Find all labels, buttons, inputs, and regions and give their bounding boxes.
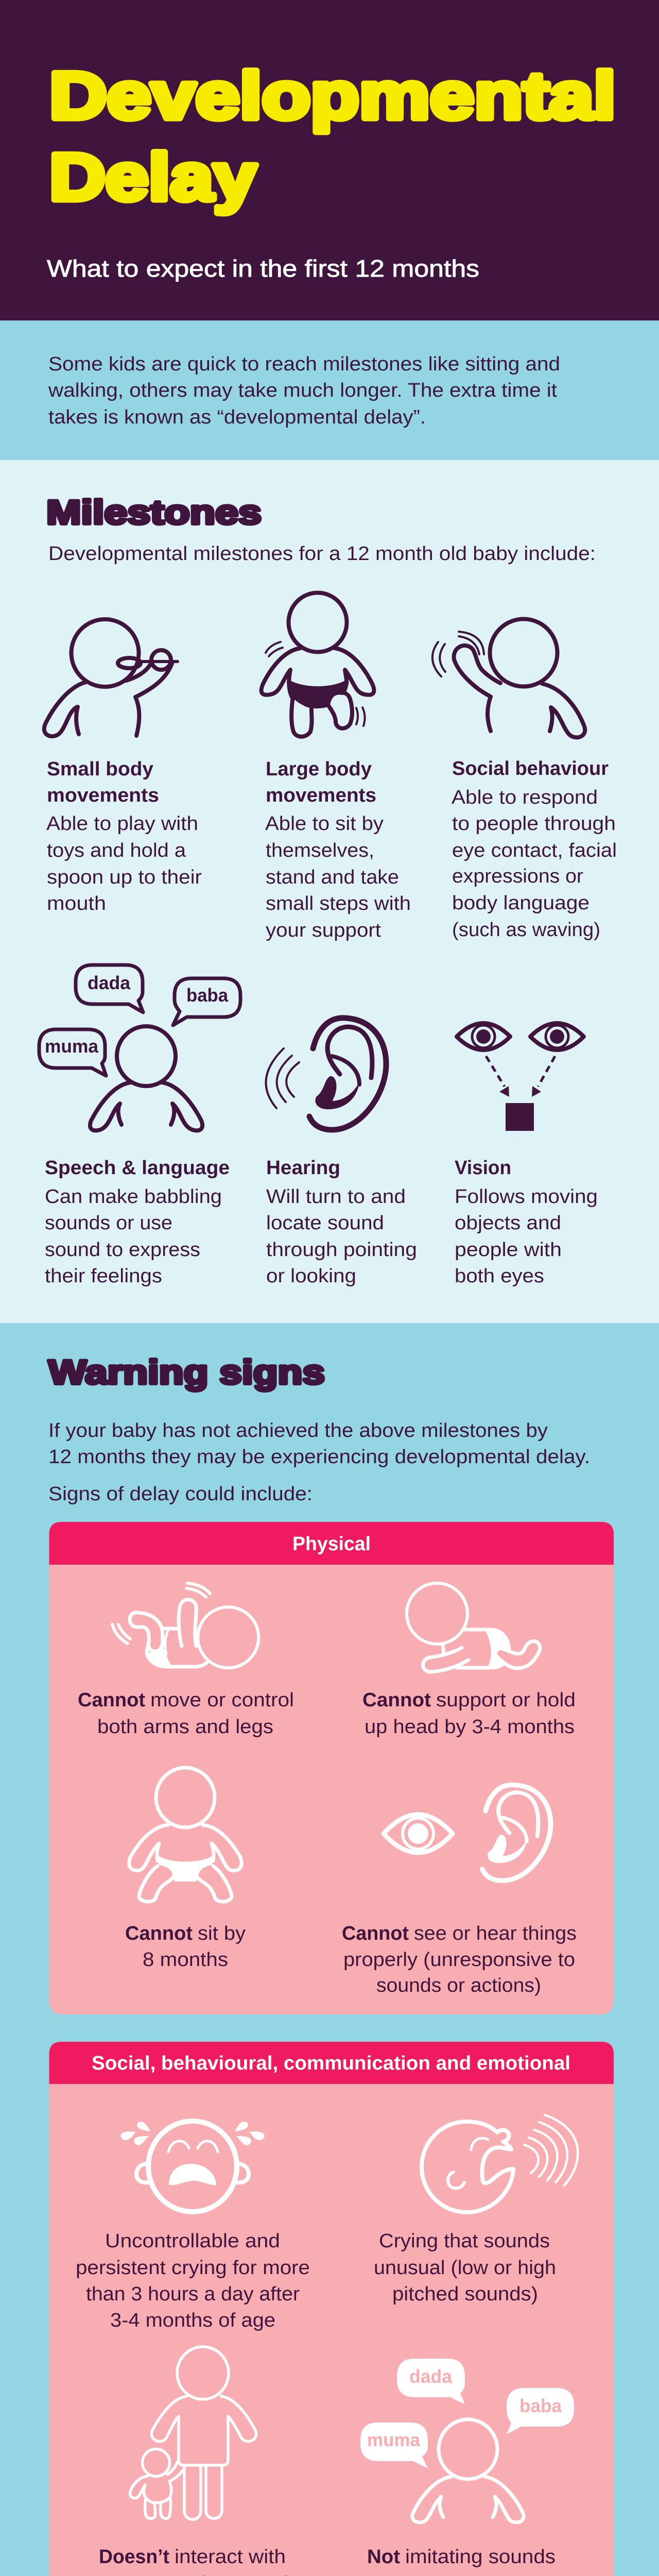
title [49, 59, 616, 214]
warning signs intro: 12 months they may be experiencing developmental delay. [48, 1446, 590, 1468]
text: vision: objects and [455, 1212, 561, 1234]
text: speech and language: sound to express [45, 1239, 200, 1261]
text: vision [455, 1157, 598, 1287]
icon: speech and language: muma [45, 1036, 99, 1057]
text: hearing: locate sound [266, 1212, 384, 1234]
text: unusual crying [374, 2230, 556, 2305]
text: cannot support head: up head by 3-4 months [365, 1716, 575, 1738]
text: uncontrollable crying [76, 2230, 310, 2331]
icon: speech and language: dada [88, 972, 131, 993]
text: cannot support head: support or hold [436, 1689, 576, 1711]
text: small body movements: Small body [47, 758, 153, 780]
text: cannot see or hear: properly (unresponsive to [343, 1949, 575, 1971]
text: cannot see or hear [342, 1923, 577, 1996]
text: vision: both eyes [455, 1265, 544, 1287]
intro text: walking, others may take much longer. The extra time it [48, 380, 557, 401]
text: cannot see or hear: Cannot [342, 1923, 409, 1944]
text: small body movements: mouth [47, 893, 106, 914]
text: social behaviour: body language [452, 892, 589, 914]
text: cannot sit [125, 1923, 246, 1971]
icon: cannot sit [129, 1768, 241, 1902]
icon: small body movements [44, 619, 178, 736]
icon: speech and language: baba [186, 985, 229, 1006]
text: cannot sit: 8 months [143, 1949, 228, 1971]
text: small body movements: Able to play with [46, 813, 198, 835]
title: Delay [49, 140, 256, 214]
text: uncontrollable crying: persistent crying for more [76, 2257, 310, 2279]
social header bar [49, 2042, 614, 2084]
text: uncontrollable crying: 3-4 months of age [110, 2310, 275, 2331]
icon: parent and child [130, 2347, 256, 2519]
icon: vision [457, 1023, 584, 1131]
text: vision: Vision [455, 1157, 511, 1179]
text: large body movements: Able to sit by [265, 813, 384, 835]
heading: warning signs: Warning signs [48, 1353, 325, 1391]
text: hearing: Will turn to and [266, 1186, 406, 1208]
icon: cannot move arms and legs [112, 1583, 258, 1668]
intro text: takes is known as “developmental delay”. [48, 406, 426, 428]
text: unusual crying: unusual (low or high [374, 2257, 556, 2279]
text: cannot move arms and legs: Cannot [78, 1689, 145, 1711]
text: cannot see or hear: see or hear things [414, 1923, 577, 1944]
warning signs intro [48, 1420, 590, 1505]
text: social behaviour: (such as waving) [452, 919, 600, 941]
icon: not imitating sounds: muma [367, 2429, 421, 2450]
panel: milestones [0, 460, 659, 1323]
text: speech and language [45, 1157, 230, 1287]
heading: milestones: Milestones [46, 493, 262, 531]
text: social behaviour: Social behaviour [452, 758, 609, 779]
text: social behaviour [452, 758, 617, 941]
text: cannot move arms and legs [78, 1689, 294, 1738]
text: small body movements: movements [47, 785, 159, 806]
text: cannot support head: Cannot [362, 1689, 431, 1711]
icon: crying in profile with sound waves [422, 2115, 578, 2212]
text: cannot see or hear: sounds or actions) [376, 1975, 541, 1996]
text: social behaviour: to people through [452, 813, 616, 835]
text: social behaviour: eye contact, facial [452, 840, 617, 861]
text: small body movements: spoon up to their [47, 867, 202, 888]
text: hearing: or looking [266, 1265, 356, 1287]
text: cannot support head [362, 1689, 576, 1738]
text: does not interact: interact with [175, 2546, 286, 2568]
icon: speech and language [39, 965, 240, 1130]
icon: cannot support head [407, 1583, 540, 1672]
text: not imitating: imitating sounds [405, 2546, 556, 2568]
text: hearing [266, 1157, 417, 1287]
milestones lead-in: Developmental milestones for a 12 month old baby include: [48, 543, 596, 565]
text: social behaviour: Able to respond [452, 787, 598, 808]
text: speech and language: their feelings [45, 1265, 162, 1287]
text: unusual crying: pitched sounds) [392, 2283, 538, 2305]
text: cannot sit: Cannot [125, 1923, 193, 1944]
warning signs intro: If your baby has not achieved the above milestones by [48, 1420, 548, 1442]
text: hearing: through pointing [266, 1239, 417, 1261]
text: uncontrollable crying: Uncontrollable and [105, 2230, 280, 2252]
text: cannot move arms and legs: move or control [150, 1689, 294, 1711]
panel: physical [49, 1522, 614, 2014]
social header bar: Social, behavioural, communication and emotional [92, 2053, 570, 2074]
text: large body movements: small steps with [266, 893, 411, 914]
text: not imitating: Not [367, 2546, 400, 2568]
text: unusual crying: Crying that sounds [379, 2230, 550, 2252]
icon: cannot see or hear [384, 1785, 551, 1880]
text: large body movements [265, 758, 411, 941]
panel: introduction [0, 320, 659, 460]
text: cannot sit: sit by [198, 1923, 246, 1944]
text: speech and language: Can make babbling [45, 1186, 222, 1208]
icon: not imitating sounds: baba [519, 2395, 562, 2416]
panel: social, behavioural, communication and emotional [49, 2042, 614, 2576]
title: Developmental [49, 59, 616, 133]
physical header bar [49, 1522, 614, 1565]
text: cannot move arms and legs: both arms and legs [97, 1716, 273, 1738]
icon: crying face [120, 2121, 265, 2212]
text: not imitating [367, 2546, 556, 2576]
warning signs intro: Signs of delay could include: [48, 1483, 313, 1505]
physical header bar: Physical [292, 1533, 371, 1555]
text: speech and language: sounds or use [45, 1212, 172, 1234]
icon: not imitating sounds: dada [409, 2366, 453, 2387]
text: vision: Follows moving [455, 1186, 598, 1208]
text: social behaviour: expressions or [452, 866, 583, 887]
icon: large body movements [262, 592, 374, 737]
text: large body movements: your support [266, 920, 381, 941]
text: large body movements: movements [266, 785, 376, 806]
text: small body movements [46, 758, 202, 914]
text: vision: people with [455, 1239, 562, 1261]
icon: social behaviour [432, 619, 585, 737]
icon: not imitating sounds [360, 2359, 574, 2522]
text: large body movements: stand and take [266, 867, 399, 888]
panel: header [0, 0, 659, 320]
text: hearing: Hearing [266, 1157, 340, 1179]
text: does not interact: Doesn’t [99, 2546, 169, 2568]
text: small body movements: toys and hold a [47, 840, 186, 861]
text: uncontrollable crying: than 3 hours a day after [86, 2283, 300, 2305]
text: large body movements: themselves, [266, 840, 374, 861]
text: does not interact [86, 2546, 300, 2576]
subtitle: What to expect in the first 12 months [47, 255, 479, 282]
panel: warning signs [0, 1323, 659, 2576]
intro text [48, 353, 560, 428]
icon: hearing [266, 1018, 386, 1130]
intro text: Some kids are quick to reach milestones like sitting and [48, 353, 560, 375]
text: speech and language: Speech & language [45, 1157, 230, 1179]
text: large body movements: Large body [266, 758, 372, 780]
